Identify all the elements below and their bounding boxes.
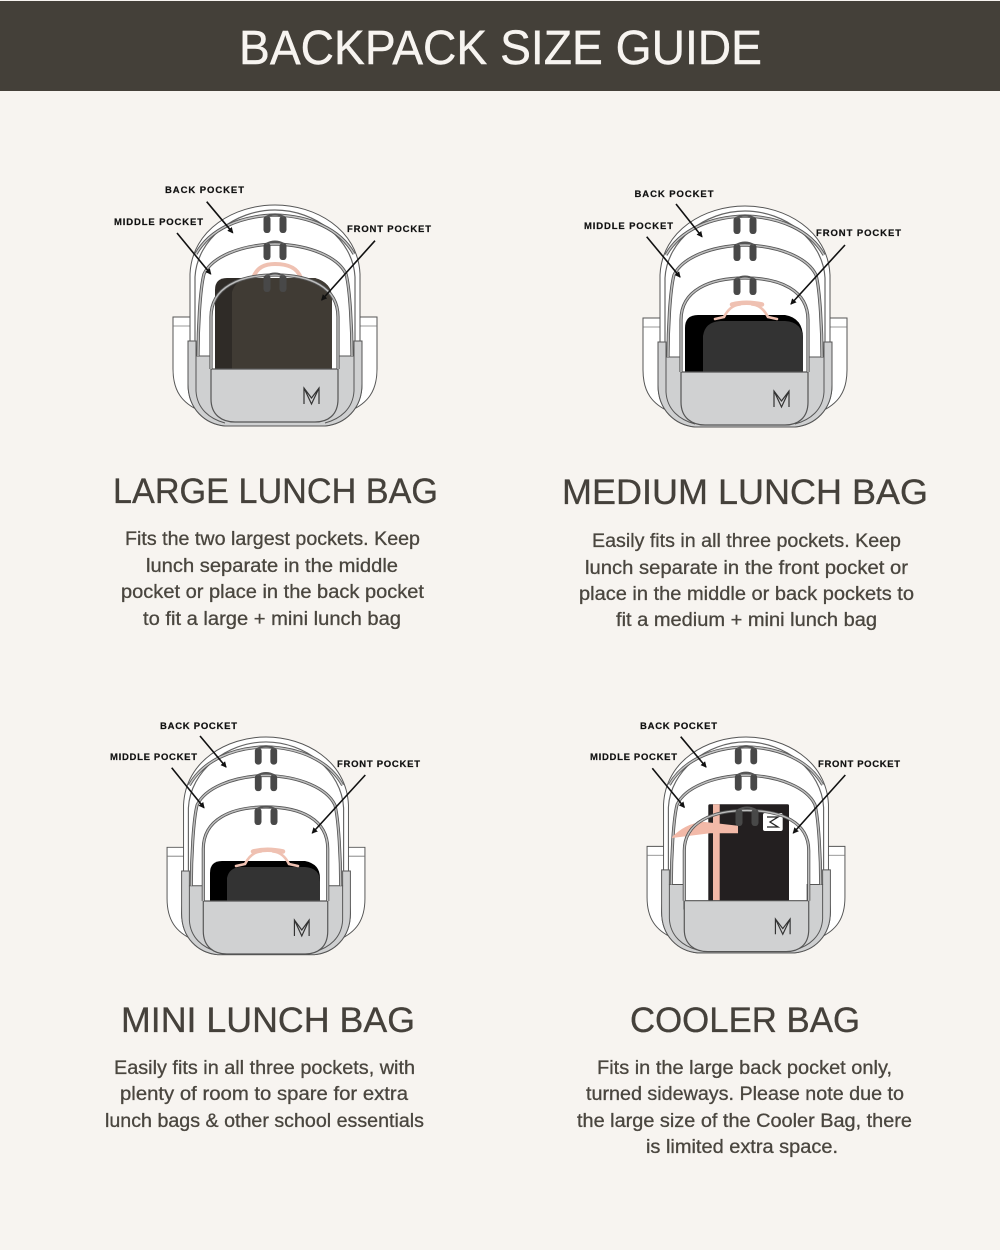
title: BACKPACK SIZE GUIDE <box>239 22 762 75</box>
description: large lunch bag: Fits the two largest pockets. Keep <box>125 528 420 550</box>
heading: cooler bag: COOLER BAG <box>630 1001 860 1040</box>
callouts: large: FRONT POCKET <box>347 224 431 235</box>
description: mini lunch bag: Easily fits in all three pockets, with <box>114 1057 415 1079</box>
lunch bag: large <box>215 264 332 370</box>
callouts: large <box>114 185 431 300</box>
callouts: large: MIDDLE POCKET <box>114 217 203 228</box>
panel: cooler bag <box>577 721 912 1158</box>
callouts: medium: BACK POCKET <box>634 189 714 200</box>
callouts: cooler: FRONT POCKET <box>818 759 900 770</box>
callouts: medium: FRONT POCKET <box>816 228 901 239</box>
panel: medium lunch bag <box>562 189 928 631</box>
heading: large lunch bag: LARGE LUNCH BAG <box>113 472 438 511</box>
description: large lunch bag <box>121 528 425 630</box>
heading: medium lunch bag: MEDIUM LUNCH BAG <box>562 473 928 512</box>
backpack: large lunch bag <box>173 205 377 426</box>
callouts: medium <box>584 189 901 304</box>
description: cooler bag: Fits in the large back pocket only, <box>597 1057 892 1079</box>
callouts: medium: MIDDLE POCKET <box>584 221 673 232</box>
panel: large lunch bag <box>113 185 438 630</box>
description: medium lunch bag: lunch separate in the front pocket or <box>585 557 909 579</box>
callouts: cooler <box>590 721 900 833</box>
cooler bag <box>672 804 789 901</box>
callouts: cooler: BACK POCKET <box>640 721 717 732</box>
description: medium lunch bag: Easily fits in all three pockets. Keep <box>592 530 901 552</box>
description: mini lunch bag <box>105 1057 424 1132</box>
description: large lunch bag: lunch separate in the middle <box>146 555 398 577</box>
description: cooler bag: turned sideways. Please note due to <box>586 1083 904 1105</box>
description: mini lunch bag: lunch bags & other school essentials <box>105 1110 424 1132</box>
lunch bag: mini <box>210 850 320 902</box>
description: cooler bag: the large size of the Cooler Bag, there <box>577 1110 912 1132</box>
callouts: mini: MIDDLE POCKET <box>110 752 197 763</box>
backpack: cooler bag <box>647 737 845 953</box>
lunch bag: medium <box>685 303 803 372</box>
header band <box>0 1 1000 91</box>
heading: mini lunch bag: MINI LUNCH BAG <box>121 1001 415 1040</box>
description: cooler bag: is limited extra space. <box>646 1136 838 1158</box>
description: large lunch bag: to fit a large + mini lunch bag <box>143 608 401 630</box>
description: medium lunch bag: fit a medium + mini lunch bag <box>616 609 877 631</box>
description: medium lunch bag <box>579 530 914 631</box>
callouts: cooler: MIDDLE POCKET <box>590 752 677 763</box>
description: mini lunch bag: plenty of room to spare for extra <box>120 1083 408 1105</box>
tag: M logo <box>763 813 783 831</box>
description: medium lunch bag: place in the middle or back pockets to <box>579 583 914 605</box>
backpack: mini lunch bag <box>167 737 365 955</box>
callouts: mini: FRONT POCKET <box>337 759 420 770</box>
panel: mini lunch bag <box>105 721 424 1132</box>
backpack: medium lunch bag <box>643 206 847 427</box>
description: large lunch bag: pocket or place in the back pocket <box>121 581 425 603</box>
description: cooler bag <box>577 1057 912 1158</box>
callouts: mini <box>110 721 420 833</box>
callouts: mini: BACK POCKET <box>160 721 237 732</box>
callouts: large: BACK POCKET <box>165 185 244 196</box>
